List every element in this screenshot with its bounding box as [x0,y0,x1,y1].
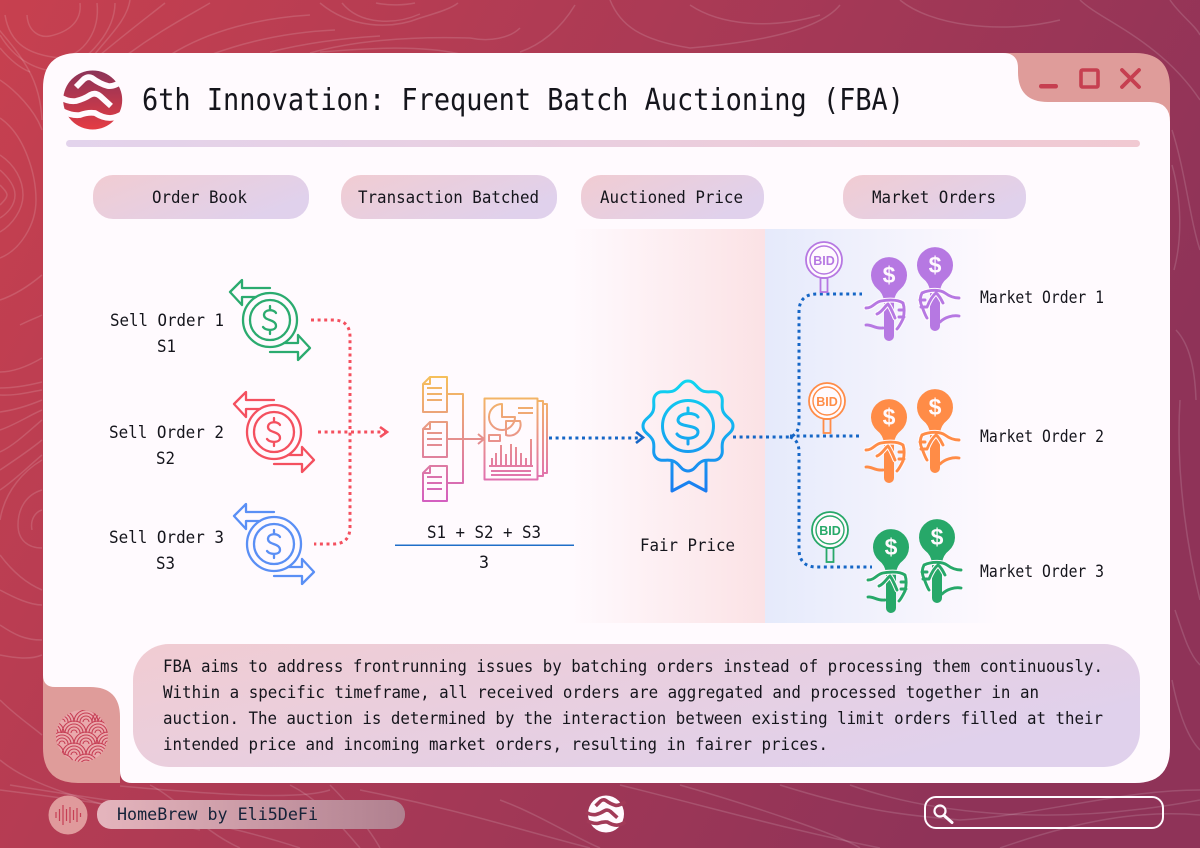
sell order 3 [109,504,314,584]
sell order 1 [110,280,310,360]
text block: FBA explanation [133,644,1140,767]
label: Fair Price: Fair Price [640,536,735,555]
icon: BID paddle green [812,512,848,562]
footer logo [586,796,625,832]
text block: FBA explanation: Within a specific timeframe, all received orders are aggregated and processed together in an [163,683,1039,702]
arrow: batch to fair price [549,432,643,443]
icon: BID paddle orange [809,383,845,433]
formula: average of sell orders [395,523,574,572]
market order 3 [812,512,1104,613]
market order 1: $ [883,262,896,288]
panel: auctioned price fade [570,229,765,623]
market order 2: $ [883,404,896,430]
heading pill: Auctioned Price: Auctioned Price [600,188,743,207]
icon: audio waveform [48,796,88,834]
arrows: fair price to market orders [733,294,872,567]
icon: BID paddle green: BID [819,524,841,538]
logo [60,70,124,130]
heading pill: Transaction Batched [341,175,557,219]
bottom-left seal tab [43,676,120,783]
panel: market orders fade [765,229,1000,623]
text block: FBA explanation: intended price and incoming market orders, resulting in fairer prices. [163,735,828,754]
formula: average of sell orders: 3 [479,553,489,572]
footer credit pill: HomeBrew by Eli5DeFi [117,805,318,824]
heading pill: Transaction Batched: Transaction Batched [358,188,539,207]
heading pill: Market Orders: Market Orders [872,188,996,207]
icon: BID paddle purple [806,242,842,292]
heading pill: Auctioned Price [581,175,764,219]
market order 1 [806,242,1104,341]
heading pill: Market Orders [843,175,1026,219]
icon: BID paddle orange: BID [816,395,838,409]
sell order 2: Sell Order 2 [109,423,224,442]
footer credit pill [97,800,405,829]
text block: FBA explanation: auction. The auction is determined by the interaction between existing limit orders filled at their [163,709,1103,728]
heading pill: Order Book [93,175,309,219]
sell order 3: S3 [156,554,175,573]
market order 3: $ [931,524,944,550]
title divider [66,140,1140,147]
icon: fair price rosette [643,381,733,491]
sell order 2: S2 [156,449,175,468]
market order 2: Market Order 2 [980,427,1104,446]
search box [925,797,1163,828]
title: 6th Innovation: Frequent Batch Auctioning (FBA) [142,83,904,118]
formula: average of sell orders: S1 + S2 + S3 [427,523,541,542]
icon: documents batched into report [423,377,547,501]
market order 2: $ [929,394,942,420]
market order 3: $ [885,534,898,560]
arrow: sell orders into batch [311,320,387,544]
market order 1: $ [929,252,942,278]
sell order 1: Sell Order 1 [110,311,224,330]
sell order 2 [109,392,314,472]
heading pill: Order Book: Order Book [152,188,247,207]
sell order 1: S1 [157,337,176,356]
market order 2 [809,383,1104,483]
icon: BID paddle purple: BID [813,254,835,268]
market order 3: Market Order 3 [980,562,1104,581]
sell order 3: Sell Order 3 [109,528,224,547]
market order 1: Market Order 1 [980,288,1104,307]
window controls tab [1000,53,1170,125]
text block: FBA explanation: FBA aims to address frontrunning issues by batching orders instead of processing them continuously. [163,657,1103,676]
